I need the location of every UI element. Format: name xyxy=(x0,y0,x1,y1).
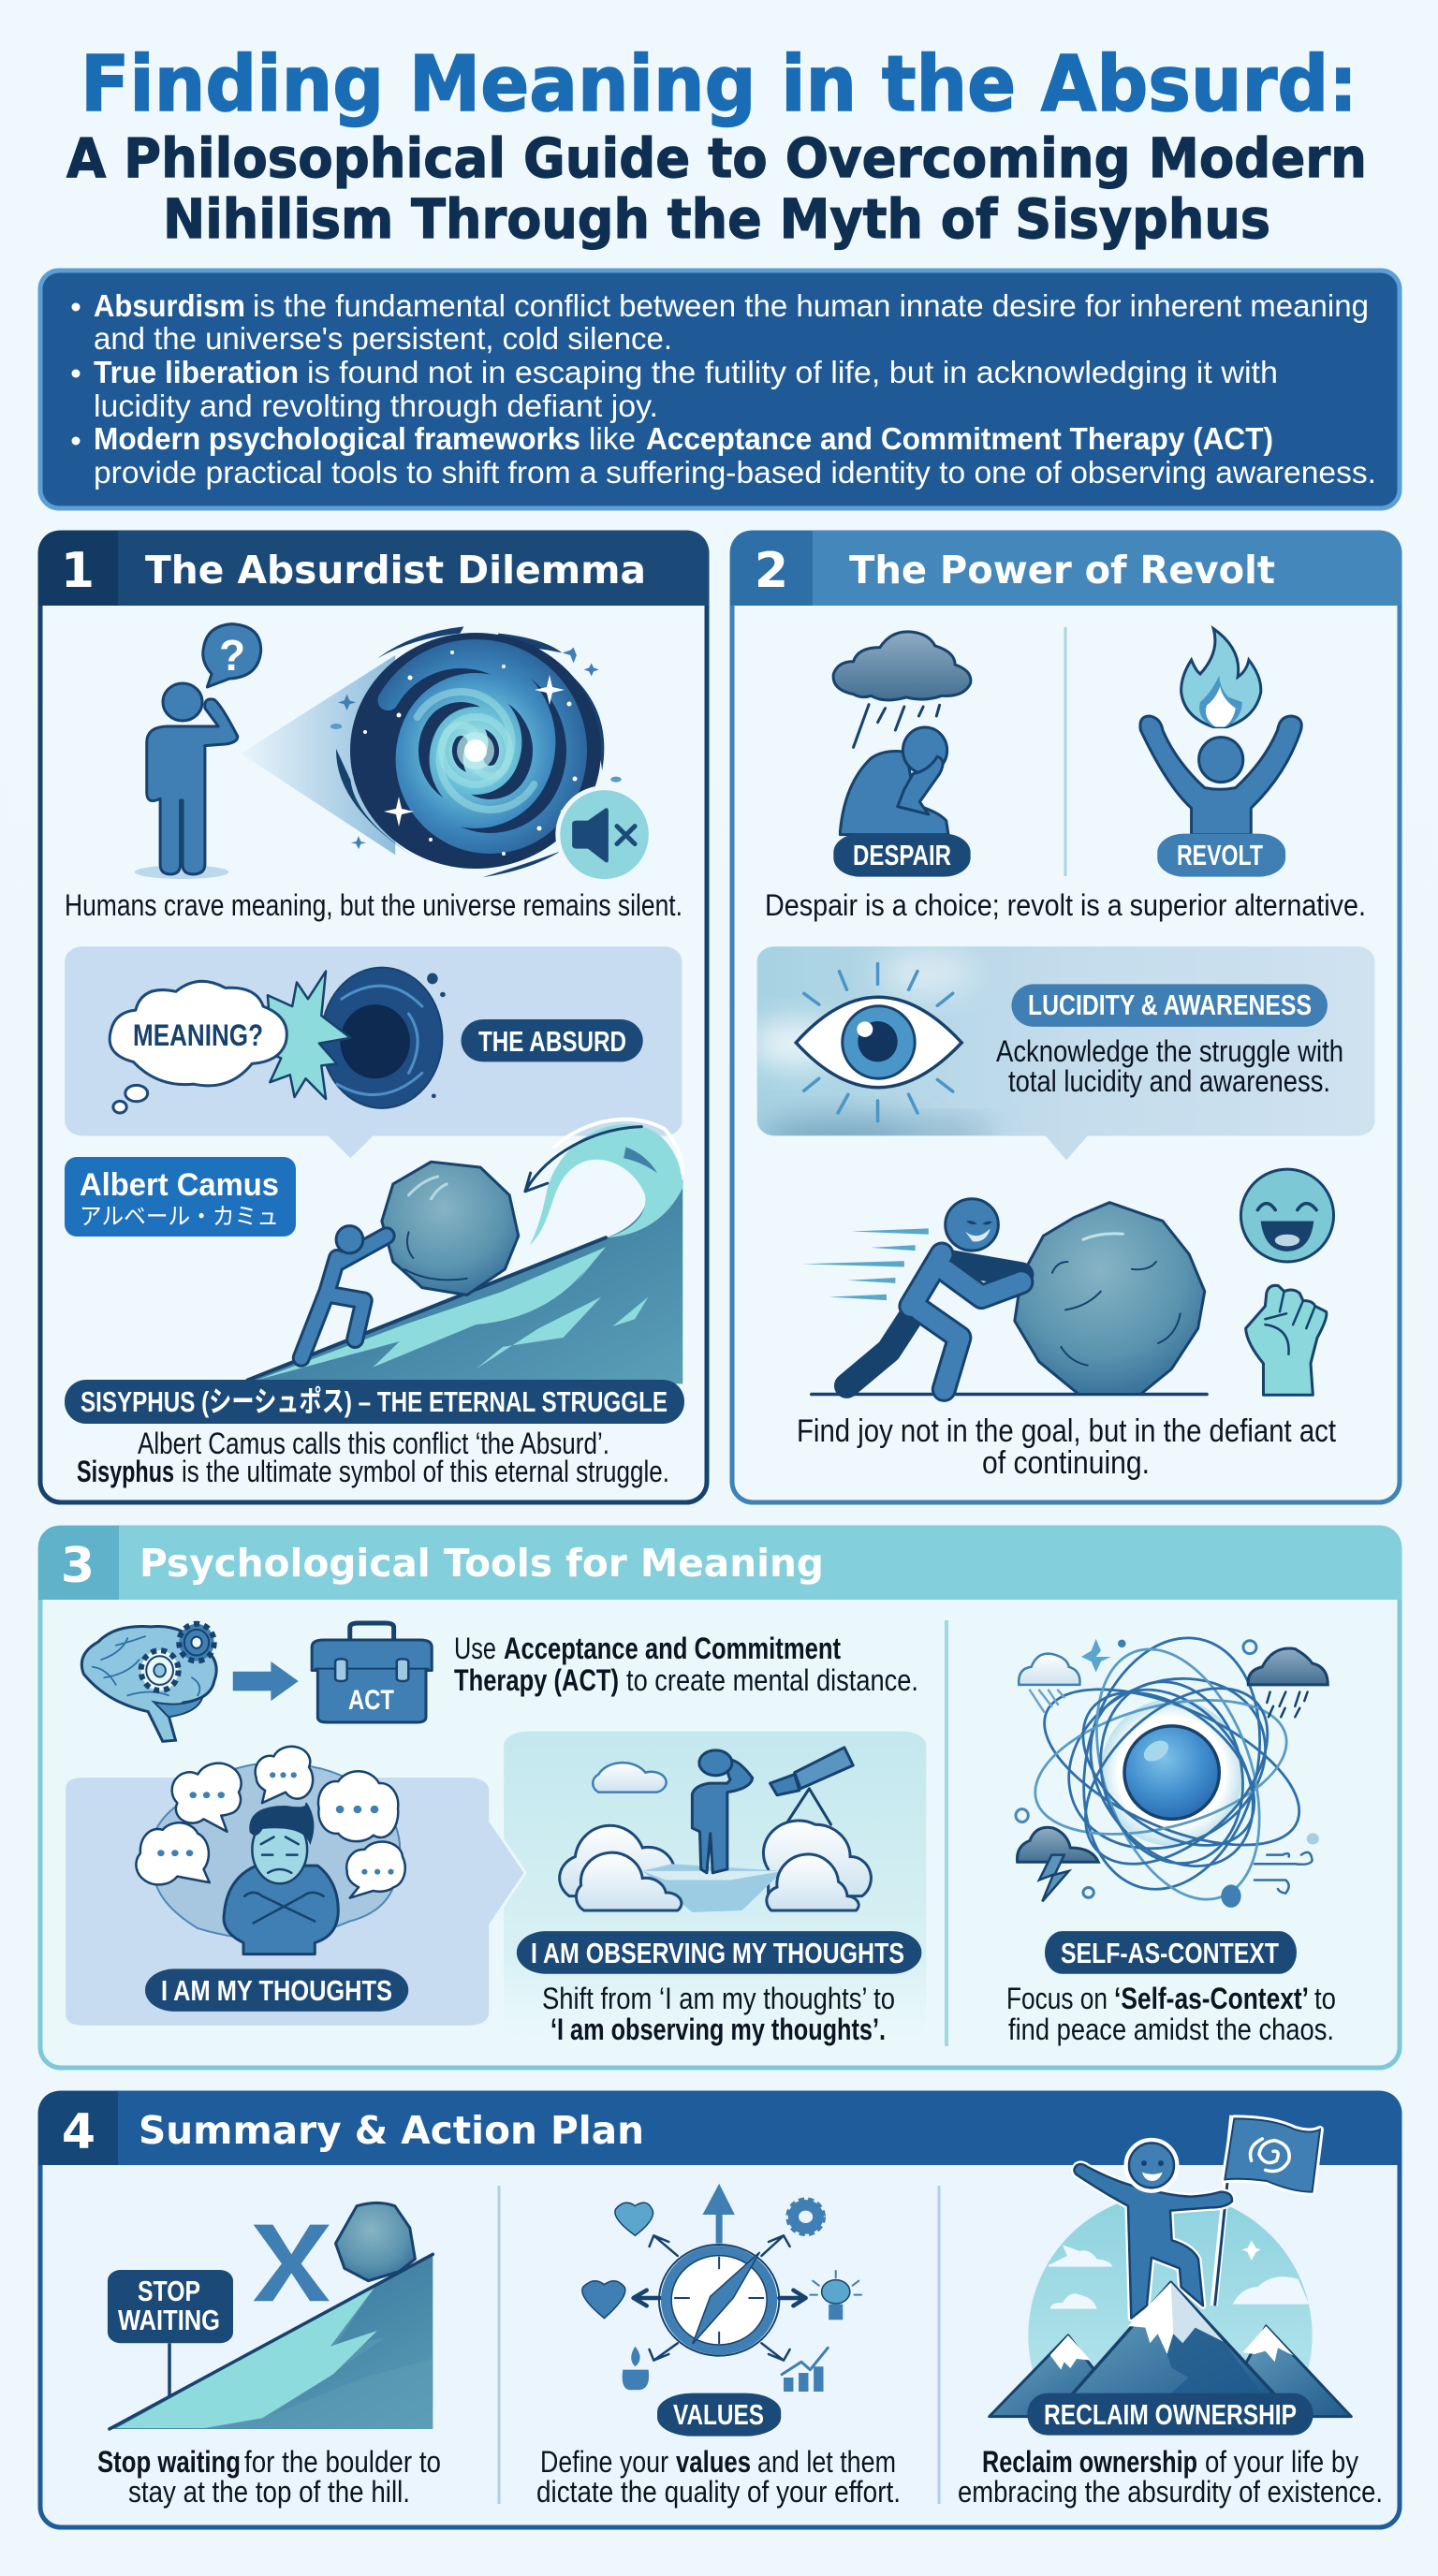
summary box: like xyxy=(589,421,636,456)
caption: camus and sisyphus: Sisyphus xyxy=(77,1455,174,1488)
panel 1: the absurdist dilemma: 1 xyxy=(61,543,95,599)
icon: values compass xyxy=(582,2186,861,2437)
panel 4: summary and action plan: 4 xyxy=(62,2104,95,2160)
icon: person on mountain with flag: RECLAIM OWNERSHIP xyxy=(1044,2398,1297,2431)
caption: stop waiting: stay at the top of the hill. xyxy=(128,2475,410,2509)
panel 4: summary and action plan xyxy=(38,2091,1401,2527)
panel: i am observing my thoughts: I AM OBSERVING MY THOUGHTS xyxy=(531,1937,904,1969)
panel 2: the power of revolt: 2 xyxy=(755,543,788,599)
panel: i am my thoughts xyxy=(65,1747,525,2027)
caption: define your values xyxy=(536,2445,901,2509)
caption: reclaim ownership: Reclaim ownership xyxy=(982,2445,1197,2479)
icon: brain, arrow and ACT toolbox: ACT xyxy=(348,1685,394,1716)
caption: focus on self-as-context: find peace amidst the chaos. xyxy=(1008,2012,1334,2046)
icon: brain, arrow and ACT toolbox xyxy=(81,1623,432,1741)
caption: focus on self-as-context: ‘Self-as-Context’ xyxy=(1114,1982,1309,2015)
summary box xyxy=(40,271,1400,508)
caption: stop waiting xyxy=(97,2445,441,2509)
caption: focus on self-as-context xyxy=(1006,1982,1336,2046)
pill: sisyphus the eternal struggle: SISYPHUS (シーシュポス) – THE ETERNAL STRUGGLE xyxy=(81,1385,668,1418)
summary box: and the universe's persistent, cold silence. xyxy=(94,321,672,356)
summary box: lucidity and revolting through defiant joy. xyxy=(94,388,658,423)
caption: find joy: Find joy not in the goal, but in the defiant act xyxy=(797,1413,1336,1449)
panel 1: the absurdist dilemma xyxy=(38,531,709,1502)
label: albert camus: Albert Camus xyxy=(80,1167,279,1203)
caption: focus on self-as-context: to xyxy=(1314,1982,1336,2015)
caption: camus and sisyphus xyxy=(77,1427,669,1488)
icon: despair figure under rain cloud xyxy=(833,632,971,877)
title: A Philosophical Guide to Overcoming Modern xyxy=(66,126,1367,190)
label: revolt: REVOLT xyxy=(1177,839,1263,871)
caption: define your values: dictate the quality of your effort. xyxy=(536,2475,901,2509)
panel 2: the power of revolt: The Power of Revolt xyxy=(849,548,1275,593)
text: use act: Acceptance and Commitment xyxy=(504,1632,841,1665)
panel: i am observing my thoughts: Shift from ‘I am my thoughts’ to xyxy=(542,1982,895,2015)
summary box: provide practical tools to shift from a suffering-based identity to one of observing awareness. xyxy=(94,455,1376,490)
caption: stop waiting: for the boulder to xyxy=(244,2445,441,2479)
title: Nihilism Through the Myth of Sisyphus xyxy=(163,187,1270,251)
callout: lucidity and awareness: total lucidity and awareness. xyxy=(1008,1064,1330,1098)
icon: stop waiting hill and boulder xyxy=(108,2203,433,2429)
summary box: Acceptance and Commitment Therapy (ACT) xyxy=(646,421,1273,456)
icon: self-as-context orb amid storm xyxy=(1016,1609,1328,1974)
icon: person on mountain with flag xyxy=(988,2115,1353,2436)
caption: camus and sisyphus: Albert Camus calls this conflict ‘the Absurd’. xyxy=(138,1427,609,1460)
panel 3: psychological tools for meaning: 3 xyxy=(61,1538,95,1594)
callout: lucidity and awareness: LUCIDITY & AWARENESS xyxy=(1028,988,1312,1021)
label: albert camus xyxy=(65,1157,296,1237)
callout: the absurd xyxy=(65,946,682,1158)
summary box: is the fundamental conflict between the human innate desire for inherent meaning xyxy=(253,288,1369,323)
caption: define your values: Define your xyxy=(540,2445,668,2479)
callout: lucidity and awareness xyxy=(749,946,1374,1160)
label: albert camus: アルベール・カミュ xyxy=(80,1204,279,1230)
panel 3: psychological tools for meaning xyxy=(38,1526,1401,2068)
callout: the absurd: THE ABSURD xyxy=(478,1025,626,1058)
caption: find joy: of continuing. xyxy=(982,1445,1150,1481)
panel: i am observing my thoughts: ‘I am observing my thoughts’. xyxy=(550,2012,886,2046)
caption: camus and sisyphus: is the ultimate symbol of this eternal struggle. xyxy=(182,1455,669,1488)
panel 1: the absurdist dilemma: The Absurdist Dilemma xyxy=(145,548,646,593)
summary box: Absurdism xyxy=(94,288,245,323)
caption: humans crave meaning: Humans crave meaning, but the universe remains silent. xyxy=(65,888,682,922)
icon: questioning person and silent galaxy: ? xyxy=(219,631,245,680)
icon: stop waiting hill and boulder: WAITING xyxy=(118,2304,220,2336)
caption: reclaim ownership: of your life by xyxy=(1205,2445,1358,2479)
pill: sisyphus the eternal struggle xyxy=(65,1380,684,1424)
panel: i am observing my thoughts xyxy=(504,1732,926,2061)
panel: i am my thoughts: I AM MY THOUGHTS xyxy=(161,1974,392,2007)
text: use act: Therapy (ACT) xyxy=(454,1663,619,1697)
illustration: sisyphus pushing boulder with wave xyxy=(247,1120,682,1383)
title: Finding Meaning in the Absurd: xyxy=(81,40,1357,129)
label: despair: DESPAIR xyxy=(853,839,951,871)
panel 2: the power of revolt xyxy=(730,531,1401,1502)
caption: stop waiting: Stop waiting xyxy=(97,2445,241,2479)
icon: values compass: VALUES xyxy=(673,2398,764,2431)
panel 4: summary and action plan: Summary & Action Plan xyxy=(139,2108,644,2153)
caption: focus on self-as-context: Focus on xyxy=(1006,1982,1108,2015)
summary box: Modern psychological frameworks xyxy=(94,421,580,456)
title xyxy=(66,40,1367,251)
caption: reclaim ownership xyxy=(958,2445,1383,2509)
summary box: True liberation xyxy=(94,355,299,389)
summary box: is found not in escaping the futility of life, but in acknowledging it with xyxy=(307,355,1278,389)
text: use act: Use xyxy=(454,1632,496,1665)
icon: stop waiting hill and boulder: STOP xyxy=(138,2275,200,2307)
illustration: joyful figure pushing boulder xyxy=(802,1169,1334,1395)
icon: questioning person and silent galaxy xyxy=(135,612,651,882)
callout: lucidity and awareness: Acknowledge the struggle with xyxy=(996,1034,1343,1068)
icon: revolt figure with flame xyxy=(1140,629,1301,877)
caption: define your values: and let them xyxy=(757,2445,896,2479)
panel 3: psychological tools for meaning: Psychological Tools for Meaning xyxy=(139,1541,824,1586)
caption: define your values: values xyxy=(676,2445,751,2479)
label: self-as-context: SELF-AS-CONTEXT xyxy=(1061,1937,1279,1969)
caption: find joy xyxy=(797,1413,1336,1481)
caption: despair is a choice: Despair is a choice; revolt is a superior alternative. xyxy=(765,888,1366,922)
text: use act: to create mental distance. xyxy=(626,1663,918,1697)
text: use act xyxy=(454,1632,918,1697)
callout: the absurd: MEANING? xyxy=(133,1018,263,1052)
